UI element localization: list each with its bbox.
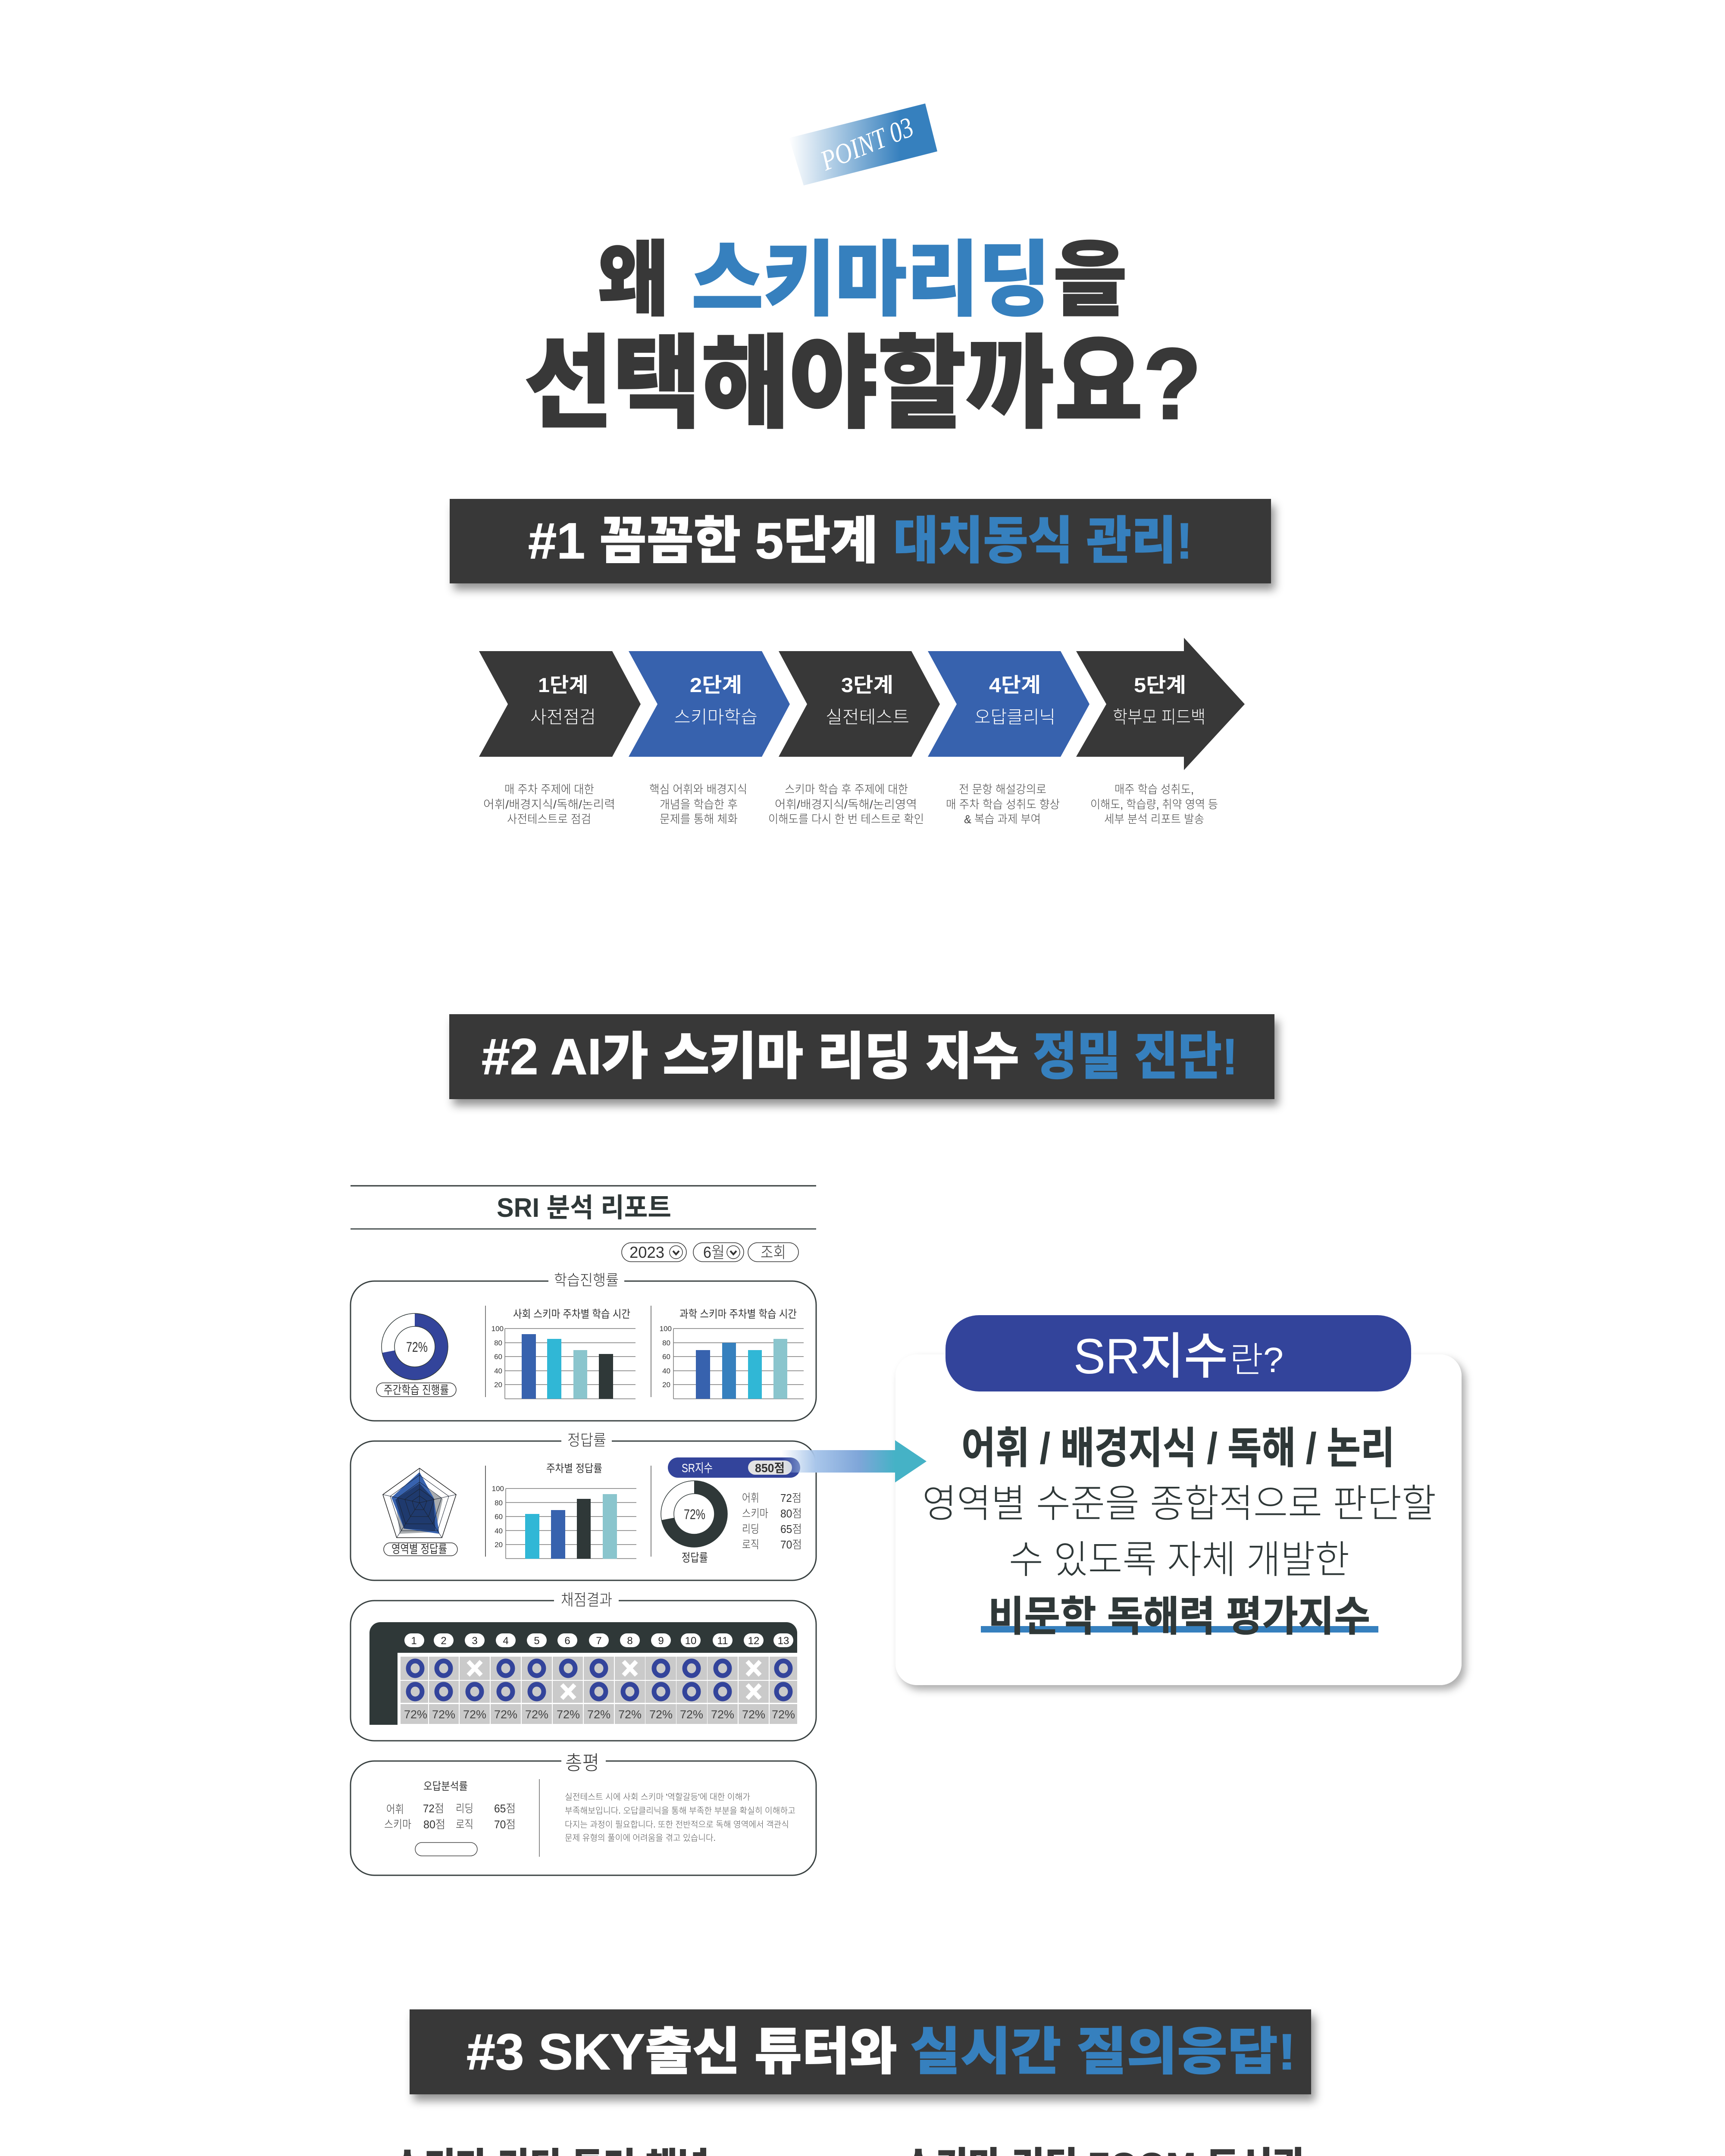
bar chart: social schema: 80 bbox=[494, 1339, 502, 1347]
percentage row: 72% bbox=[432, 1708, 455, 1721]
question numbers: 11 bbox=[717, 1635, 728, 1647]
heading bar 3 bbox=[410, 2009, 1311, 2094]
step descriptions: 이해도, 학습량, 취약 영역 등 bbox=[1090, 798, 1218, 811]
callout header pill bbox=[945, 1315, 1411, 1391]
question numbers: 7 bbox=[596, 1635, 602, 1647]
donut: weekly progress bbox=[376, 1313, 456, 1397]
callout body text: 어휘 / 배경지식 / 독해 / 논리 bbox=[961, 1424, 1395, 1473]
title bbox=[524, 235, 1202, 440]
step descriptions: 어휘/배경지식/독해/논리영역 bbox=[775, 798, 917, 811]
heading bar 2: #2 AI가 스키마 리딩 지수 bbox=[482, 1028, 1019, 1085]
bar chart: science schema: 과학 스키마 주차별 학습 시간 bbox=[679, 1308, 797, 1320]
review text bbox=[565, 1792, 795, 1843]
review text: 실전테스트 시에 사회 스키마 '역할갈등'에 대한 이해가 bbox=[565, 1792, 750, 1802]
step 1 bbox=[479, 651, 641, 757]
wrong answer analysis: 로직 bbox=[456, 1818, 473, 1831]
wrong answer analysis: 80점 bbox=[423, 1818, 445, 1831]
step 1: 1단계 bbox=[538, 674, 588, 696]
question numbers: 6 bbox=[564, 1635, 570, 1647]
date selectors: 2023 bbox=[629, 1244, 664, 1261]
panel: learning progress: 학습진행률 bbox=[554, 1272, 619, 1289]
question numbers: 12 bbox=[748, 1635, 759, 1647]
donut: correct rate: 72% bbox=[684, 1507, 705, 1522]
step descriptions: 사전테스트로 점검 bbox=[507, 813, 591, 826]
wrong answer analysis: 스키마 bbox=[384, 1818, 411, 1831]
heading bar 1: #1 꼼꼼한 5단계 bbox=[528, 513, 878, 570]
heading bar 1: 대치동식 관리! bbox=[893, 513, 1193, 570]
question numbers: 2 bbox=[441, 1635, 447, 1647]
title: 을 bbox=[1053, 235, 1127, 326]
bar chart: social schema: 40 bbox=[494, 1367, 502, 1375]
step descriptions: 어휘/배경지식/독해/논리력 bbox=[483, 798, 615, 811]
step descriptions: & 복습 과제 부여 bbox=[964, 813, 1041, 826]
wrong answer analysis: 70점 bbox=[494, 1818, 516, 1831]
panel: correct rate bbox=[351, 1431, 816, 1580]
percentage row: 72% bbox=[680, 1708, 703, 1721]
score list: 로직 bbox=[742, 1538, 759, 1551]
step 2 bbox=[629, 651, 790, 757]
question numbers: 3 bbox=[472, 1635, 478, 1647]
bar chart: weekly correct rate: 40 bbox=[495, 1527, 503, 1535]
bar chart: science schema: 80 bbox=[662, 1339, 670, 1347]
answer grid bbox=[401, 1657, 797, 1724]
score list: 스키마 bbox=[742, 1507, 768, 1520]
SR index pill: SR지수 bbox=[682, 1461, 713, 1475]
radar chart: 영역별 정답률 bbox=[391, 1543, 447, 1556]
score list bbox=[742, 1492, 802, 1551]
wrong answer analysis: 리딩 bbox=[456, 1802, 473, 1815]
callout header pill: SR지수 bbox=[1074, 1329, 1228, 1384]
step descriptions: 전 문항 해설강의로 bbox=[959, 783, 1046, 796]
date selectors: 6월 bbox=[703, 1244, 725, 1261]
callout body text: 비문학 독해력 평가지수 bbox=[988, 1594, 1370, 1640]
question numbers: 10 bbox=[685, 1635, 696, 1647]
percentage row: 72% bbox=[557, 1708, 580, 1721]
bar chart: social schema: 사회 스키마 주차별 학습 시간 bbox=[513, 1308, 630, 1320]
callout header pill: 란? bbox=[1230, 1341, 1284, 1380]
wrong answer analysis: 오답분석률 bbox=[423, 1780, 468, 1792]
wrong answer analysis: 65점 bbox=[494, 1802, 516, 1815]
bar chart: weekly correct rate: 100 bbox=[492, 1485, 504, 1493]
question numbers: 1 bbox=[411, 1635, 417, 1647]
X marks bbox=[468, 1661, 760, 1698]
bar chart: social schema: 20 bbox=[494, 1381, 502, 1389]
bar chart: science schema: 100 bbox=[660, 1325, 672, 1333]
percentage row: 72% bbox=[742, 1708, 765, 1721]
radar chart bbox=[383, 1468, 457, 1556]
wrong answer analysis bbox=[384, 1780, 516, 1856]
panel: overall review bbox=[351, 1752, 816, 1875]
step 5: 5단계 bbox=[1134, 674, 1186, 696]
step 1: 사전점검 bbox=[530, 707, 596, 727]
percentage row: 72% bbox=[404, 1708, 427, 1721]
point tag: POINT 03 bbox=[816, 111, 918, 177]
date selectors: 조회 bbox=[761, 1244, 786, 1261]
bar chart: weekly correct rate: 20 bbox=[495, 1541, 503, 1549]
step 2: 2단계 bbox=[690, 674, 742, 696]
step descriptions: 스키마 학습 후 주제에 대한 bbox=[785, 783, 908, 796]
donut: weekly progress: 주간학습 진행률 bbox=[384, 1384, 449, 1397]
bar chart: weekly correct rate bbox=[492, 1463, 636, 1559]
score list: 어휘 bbox=[742, 1492, 759, 1504]
donut: weekly progress: 72% bbox=[406, 1339, 428, 1355]
heading bar 1 bbox=[450, 499, 1271, 583]
bar chart: weekly correct rate: 60 bbox=[495, 1513, 503, 1521]
answer table frame bbox=[369, 1622, 797, 1725]
five step process arrow bbox=[479, 638, 1245, 770]
step 2: 스키마학습 bbox=[674, 707, 758, 727]
percentage row: 72% bbox=[525, 1708, 548, 1721]
heading bar 3: 실시간 질의응답! bbox=[910, 2024, 1296, 2081]
step descriptions: 매 주차 주제에 대한 bbox=[504, 783, 594, 796]
title: 스키마리딩 bbox=[692, 235, 1050, 326]
score list: 리딩 bbox=[742, 1523, 759, 1536]
panel: overall review: 총평 bbox=[565, 1752, 599, 1774]
step descriptions: 이해도를 다시 한 번 테스트로 확인 bbox=[768, 813, 924, 826]
question numbers: 13 bbox=[778, 1635, 789, 1647]
question numbers: 5 bbox=[534, 1635, 540, 1647]
bar chart: science schema: 40 bbox=[662, 1367, 670, 1375]
callout body text bbox=[922, 1424, 1436, 1640]
review text: 다지는 과정이 필요합니다. 또한 전반적으로 독해 영역에서 객관식 bbox=[565, 1820, 789, 1830]
date selectors bbox=[622, 1243, 798, 1262]
review text: 부족해보입니다. 오답클리닉을 통해 부족한 부분을 확실히 이해하고 bbox=[565, 1806, 795, 1816]
SR index pill: 850점 bbox=[755, 1461, 785, 1475]
bar chart: weekly correct rate: 80 bbox=[495, 1499, 503, 1507]
step descriptions: 매주 학습 성취도, bbox=[1115, 783, 1194, 796]
step 5 bbox=[1076, 638, 1245, 770]
question numbers: 9 bbox=[658, 1635, 664, 1647]
heading bar 2 bbox=[449, 1014, 1274, 1099]
bar chart: science schema: 20 bbox=[662, 1381, 670, 1389]
step descriptions: 세부 분석 리포트 발송 bbox=[1104, 813, 1204, 826]
question numbers: 4 bbox=[503, 1635, 509, 1647]
step 5: 학부모 피드백 bbox=[1113, 707, 1205, 727]
step 3: 3단계 bbox=[841, 674, 893, 696]
bar chart: social schema bbox=[492, 1308, 636, 1399]
title: 왜 bbox=[598, 235, 668, 326]
step descriptions: 핵심 어휘와 배경지식 bbox=[649, 783, 747, 796]
score list: 70점 bbox=[780, 1538, 802, 1551]
panel: grading results: 채점결과 bbox=[561, 1591, 612, 1609]
panel: grading results bbox=[351, 1591, 816, 1741]
report title: SRI 분석 리포트 bbox=[497, 1193, 671, 1223]
step descriptions: 개념을 학습한 후 bbox=[660, 798, 738, 811]
percentage row: 72% bbox=[649, 1708, 673, 1721]
percentage row: 72% bbox=[494, 1708, 517, 1721]
question numbers bbox=[404, 1633, 793, 1647]
step 4: 오답클리닉 bbox=[974, 707, 1055, 727]
step 4: 4단계 bbox=[989, 674, 1041, 696]
donut: correct rate bbox=[661, 1481, 727, 1564]
step 3: 실전테스트 bbox=[826, 707, 909, 727]
bar chart: science schema bbox=[660, 1308, 804, 1399]
percentage row bbox=[404, 1708, 795, 1721]
callout body text: 수 있도록 자체 개발한 bbox=[1009, 1539, 1349, 1582]
question numbers: 8 bbox=[627, 1635, 633, 1647]
heading bar 2: 정밀 진단! bbox=[1033, 1028, 1238, 1085]
bar chart: weekly correct rate: 주차별 정답률 bbox=[546, 1463, 602, 1475]
donut: correct rate: 정답률 bbox=[682, 1551, 708, 1564]
step 4 bbox=[928, 651, 1089, 757]
step 3 bbox=[779, 651, 940, 757]
step descriptions: 문제를 통해 체화 bbox=[660, 813, 738, 826]
percentage row: 72% bbox=[772, 1708, 795, 1721]
SR index pill bbox=[668, 1457, 800, 1478]
SR index callout card bbox=[895, 1315, 1462, 1685]
panel: learning progress bbox=[351, 1272, 816, 1421]
wrong answer analysis: 72점 bbox=[423, 1802, 444, 1815]
score list: 65점 bbox=[780, 1523, 802, 1536]
score list: 72점 bbox=[780, 1492, 801, 1504]
review text: 문제 유형의 풀이에 어려움을 겪고 있습니다. bbox=[565, 1833, 716, 1843]
bar chart: science schema: 60 bbox=[662, 1353, 670, 1361]
callout body text: 영역별 수준을 종합적으로 판단할 bbox=[922, 1482, 1436, 1526]
percentage row: 72% bbox=[618, 1708, 642, 1721]
score list: 80점 bbox=[780, 1507, 802, 1520]
percentage row: 72% bbox=[463, 1708, 486, 1721]
percentage row: 72% bbox=[587, 1708, 610, 1721]
wrong answer analysis: 어휘 bbox=[386, 1803, 404, 1816]
O marks bbox=[408, 1661, 790, 1699]
step descriptions bbox=[483, 783, 1218, 826]
panel: correct rate: 정답률 bbox=[567, 1431, 606, 1449]
bar chart: social schema: 60 bbox=[494, 1353, 502, 1361]
percentage row: 72% bbox=[711, 1708, 734, 1721]
heading bar 3: #3 SKY출신 튜터와 bbox=[466, 2024, 897, 2081]
SRI report bbox=[351, 1186, 816, 1875]
title: 선택해야할까요? bbox=[524, 327, 1202, 440]
step descriptions: 매 주차 학습 성취도 향상 bbox=[946, 798, 1060, 811]
gradient arrow bbox=[782, 1440, 927, 1482]
bar chart: social schema: 100 bbox=[492, 1325, 504, 1333]
